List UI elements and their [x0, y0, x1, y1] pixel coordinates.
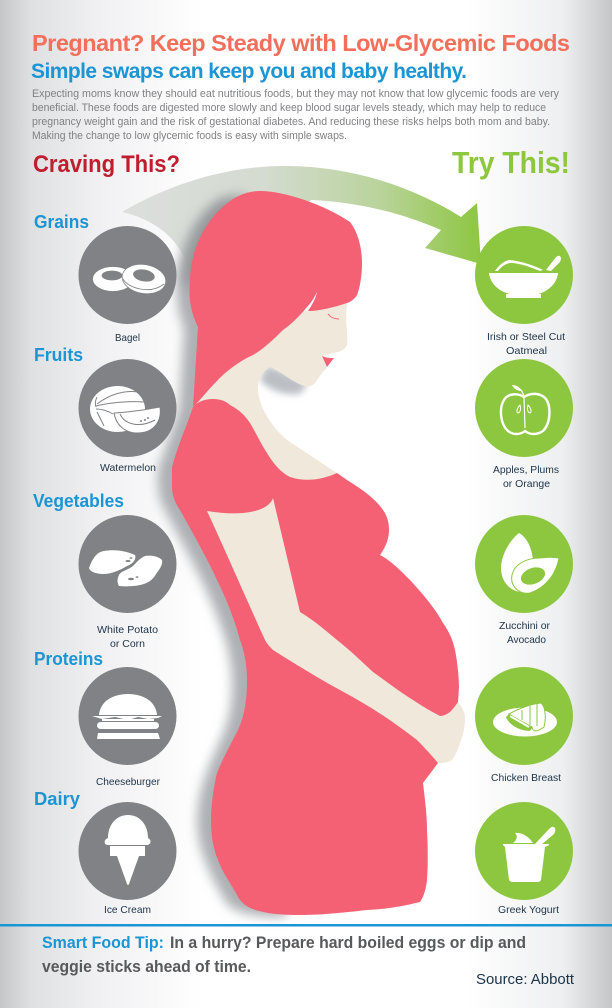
icon circle	[78, 515, 176, 613]
food row: dairy craving	[34, 788, 176, 916]
intro text: Making the change to low glycemic foods is easy with simple swaps.	[32, 130, 347, 142]
label: Watermelon	[100, 462, 156, 474]
icon circle	[475, 226, 573, 324]
label: or Orange	[503, 478, 550, 490]
icon: chicken on plate	[493, 703, 557, 736]
intro text: beneficial. These foods are digested more slowly and keep blood sugar levels steady, which may help to reduce	[32, 102, 546, 114]
heading: craving this: Craving This?	[33, 151, 180, 178]
heading: try this: Try This!	[452, 145, 570, 180]
label: Oatmeal	[506, 345, 547, 357]
label: Cheeseburger	[96, 776, 160, 788]
icon circle	[475, 667, 573, 765]
title: Pregnant? Keep Steady with Low-Glycemic Foods	[32, 30, 570, 56]
label	[499, 620, 550, 646]
food row: grains craving	[34, 211, 176, 344]
category: dairy: Dairy	[34, 788, 81, 809]
label: or Corn	[110, 638, 145, 650]
swap: apples	[475, 359, 573, 490]
icon: bowl	[489, 256, 561, 298]
icon: bagel	[92, 261, 168, 297]
label: Chicken Breast	[491, 772, 561, 784]
label	[487, 331, 565, 357]
label: Bagel	[115, 332, 140, 344]
label	[493, 464, 559, 490]
swap: yogurt	[475, 802, 573, 916]
icon circle	[78, 359, 176, 457]
source: Source: Abbott	[476, 971, 575, 988]
smart food tip: In a hurry? Prepare hard boiled eggs or dip and	[170, 934, 526, 952]
label: Zucchini or	[499, 620, 550, 632]
icon: watermelon	[90, 386, 160, 433]
eye	[328, 314, 339, 319]
icon: ice cream	[105, 815, 151, 885]
chin shadow	[260, 366, 308, 394]
icon: yogurt cup	[503, 827, 555, 882]
category: vegetables: Vegetables	[33, 490, 124, 511]
label: Ice Cream	[104, 904, 151, 916]
subtitle: Simple swaps can keep you and baby healthy.	[31, 60, 467, 83]
label	[97, 624, 158, 650]
label: Greek Yogurt	[498, 904, 559, 916]
category: fruits: Fruits	[34, 344, 83, 365]
divider line	[0, 924, 612, 926]
category: proteins: Proteins	[34, 648, 103, 669]
dress	[172, 399, 459, 915]
label: Irish or Steel Cut	[487, 331, 565, 343]
intro text: Expecting moms know they should eat nutritious foods, but they may not know that low glycemic foods are very	[32, 88, 559, 100]
smart food tip: veggie sticks ahead of time.	[42, 958, 251, 976]
icon circle	[78, 226, 176, 324]
swap: avocado	[475, 515, 573, 646]
icon circle	[78, 802, 176, 900]
category: grains: Grains	[34, 211, 89, 232]
icon: potato	[89, 550, 162, 586]
icon: apple	[501, 385, 549, 434]
lips	[322, 356, 334, 367]
icon circle	[78, 667, 176, 765]
arm	[207, 498, 465, 763]
intro text	[32, 88, 559, 142]
icon: cheeseburger	[92, 694, 162, 739]
icon circle	[475, 802, 573, 900]
icon circle	[475, 359, 573, 457]
intro text: pregnancy weight gain and the risk of gestational diabetes. And reducing these risks helps both mom and baby.	[32, 116, 550, 128]
icon: avocado	[501, 533, 559, 593]
food row: fruits craving	[34, 344, 176, 474]
hair shadow	[184, 200, 240, 285]
food row: proteins craving	[34, 648, 176, 788]
food row: vegetables craving	[33, 490, 176, 650]
woman figure	[172, 191, 465, 915]
woman shadow	[158, 193, 296, 917]
label: Avocado	[507, 634, 546, 646]
arrow	[122, 166, 481, 290]
swap: oatmeal	[475, 226, 573, 357]
label: White Potato	[97, 624, 158, 636]
smart food tip: Smart Food Tip:	[42, 934, 164, 952]
skin: neck and face	[193, 303, 347, 500]
swap: chicken	[475, 667, 573, 784]
icon circle	[475, 515, 573, 613]
hair	[189, 191, 362, 407]
smart food tip	[42, 934, 526, 976]
label: Apples, Plums	[493, 464, 559, 476]
